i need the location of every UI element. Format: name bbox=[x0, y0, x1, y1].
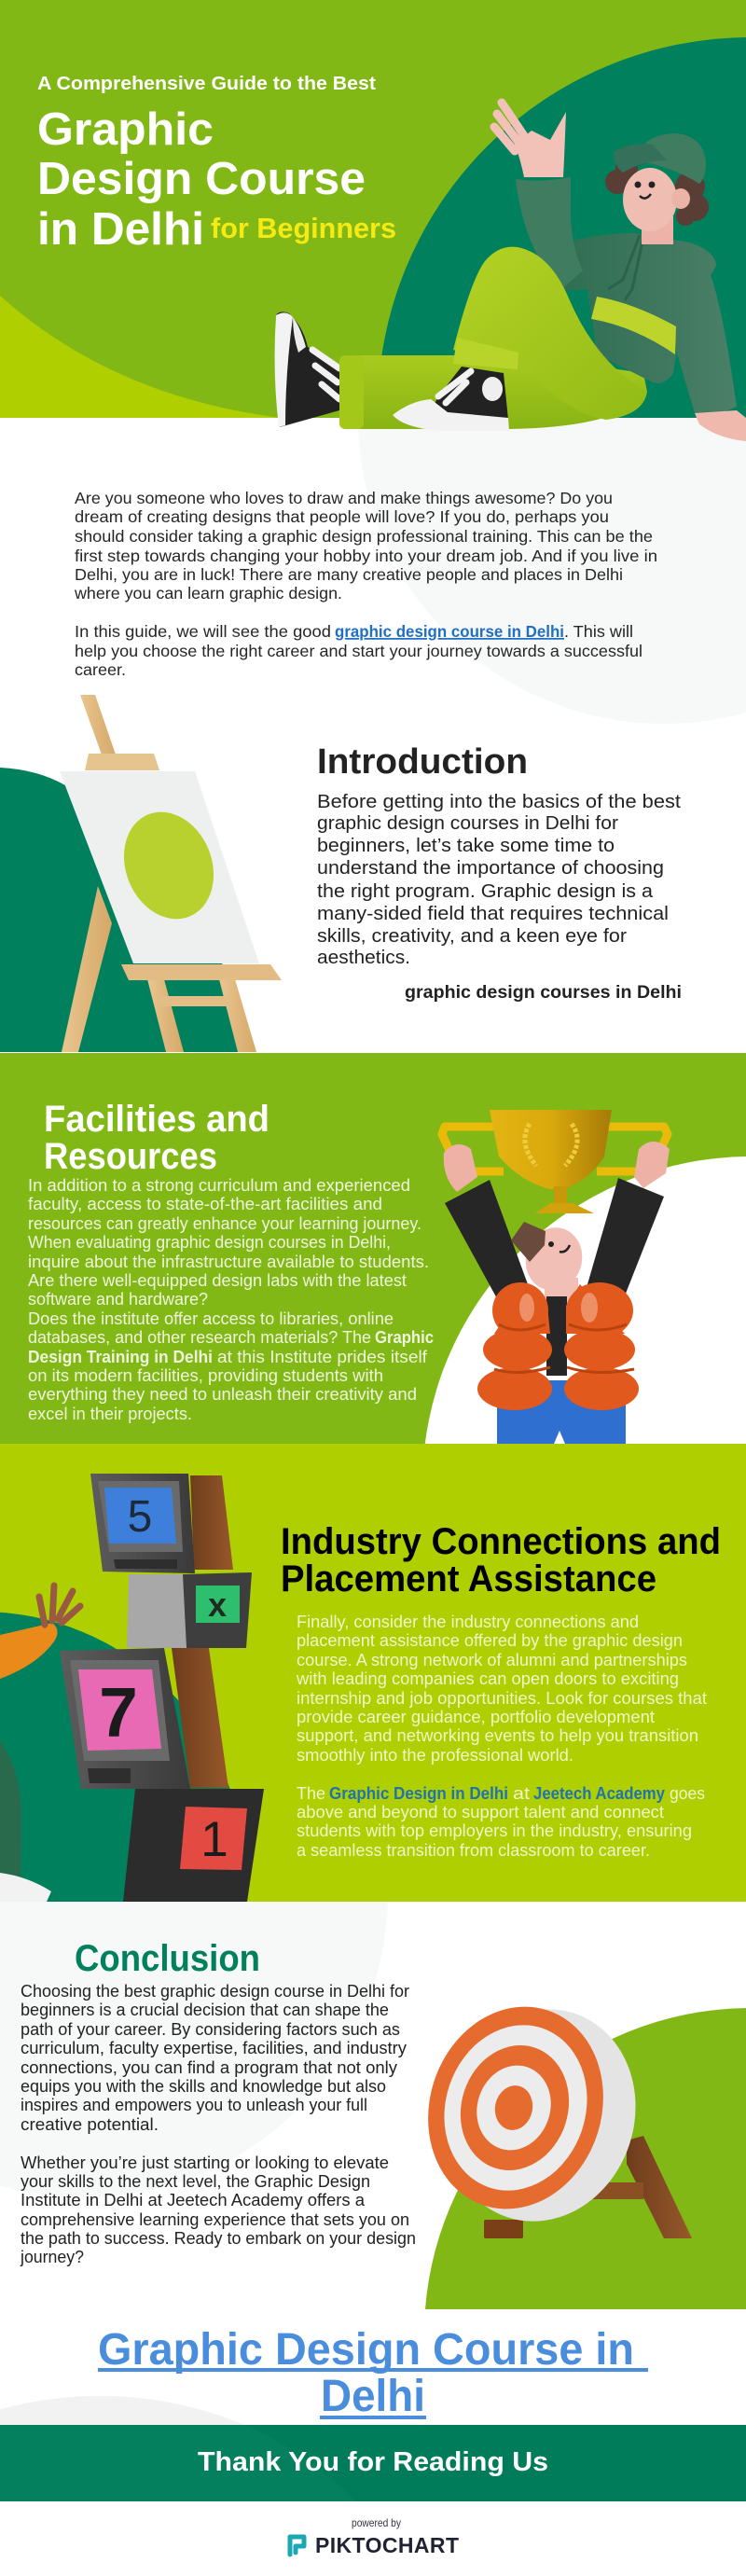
illustration: sitting character bbox=[275, 103, 746, 441]
paragraph two: comprehensive learning experience that sets you on bbox=[21, 2209, 409, 2229]
paragraph one: path of your career. By considering factors such as bbox=[21, 2019, 400, 2039]
text block: opening paragraphs: In this guide, we will see the good bbox=[75, 622, 331, 641]
panel: industry connections bbox=[0, 1444, 746, 1902]
paragraph: resources can greatly enhance your learning journey. bbox=[28, 1213, 421, 1233]
paragraph two: at bbox=[513, 1784, 530, 1803]
panel: header bbox=[0, 0, 746, 441]
heading: Industry Connections and bbox=[281, 1521, 721, 1562]
paragraph one: internship and job opportunities. Look for courses that bbox=[297, 1689, 707, 1708]
paragraph: on its modern facilities, providing students with bbox=[28, 1365, 383, 1385]
green blob bbox=[0, 768, 241, 1052]
paragraph: In addition to a strong curriculum and experienced bbox=[28, 1175, 410, 1195]
text block: opening paragraphs: . This will bbox=[564, 622, 633, 641]
illustration: person holding trophy bbox=[442, 1110, 670, 1444]
paragraph two: Institute in Delhi at Jeetech Academy offers a bbox=[21, 2190, 366, 2209]
text block: opening paragraphs: Delhi, you are in luck! There are many creative people and places in Delhi bbox=[75, 565, 623, 584]
paragraph two: journey? bbox=[20, 2247, 84, 2266]
paragraph: Design Training in Delhi bbox=[28, 1347, 213, 1366]
heading: Placement Assistance bbox=[281, 1558, 656, 1600]
paragraph one: Choosing the best graphic design course in Delhi for bbox=[21, 1981, 409, 2001]
paragraph bbox=[317, 791, 681, 968]
paragraph: many-sided field that requires technical bbox=[317, 903, 669, 924]
paragraph: Are there well-equipped design labs with the latest bbox=[28, 1270, 407, 1290]
tagline: for Beginners bbox=[211, 212, 396, 244]
paragraph: beginners, let’s take some time to bbox=[317, 835, 615, 856]
link heading: Delhi bbox=[321, 2372, 425, 2421]
paragraph: aesthetics. bbox=[317, 947, 410, 968]
paragraph one: course. A strong network of alumni and partnerships bbox=[297, 1651, 687, 1669]
powered by: powered by bbox=[352, 2516, 401, 2529]
panel: introduction bbox=[0, 695, 682, 1052]
paragraph one: equips you with the skills and knowledge but also bbox=[21, 2076, 386, 2096]
paragraph: skills, creativity, and a keen eye for bbox=[317, 925, 627, 947]
text block: opening paragraphs bbox=[74, 489, 657, 679]
illustration: retro monitors: 7 bbox=[99, 1673, 138, 1752]
paragraph one: with leading companies can open doors to exciting bbox=[296, 1669, 679, 1688]
icon: logo mark bbox=[290, 2537, 304, 2555]
paragraph one: connections, you can find a program that not only bbox=[21, 2057, 398, 2077]
text block: opening paragraphs: dream of creating designs that people will love? If you do, perhaps you bbox=[75, 507, 609, 526]
illustration: target bbox=[403, 1984, 692, 2246]
paragraph two: your skills to the next level, the Graphic Design bbox=[21, 2171, 370, 2191]
heading bbox=[44, 1099, 269, 1177]
paragraph one: support, and networking events to help you transition bbox=[297, 1726, 698, 1745]
illustration: retro monitors: x bbox=[208, 1586, 227, 1624]
paragraph: databases, and other research materials? The bbox=[28, 1327, 371, 1347]
panel: thank you band bbox=[0, 2425, 746, 2501]
illustration: retro monitors: 1 bbox=[200, 1812, 228, 1867]
subtitle: A Comprehensive Guide to the Best bbox=[37, 74, 376, 94]
paragraph: faculty, access to state-of-the-art facilities and bbox=[28, 1194, 382, 1213]
grey arc bbox=[0, 2396, 244, 2425]
paragraph two: goes bbox=[670, 1784, 705, 1803]
text block: opening paragraphs: first step towards changing your hobby into your dream job. And if you live in bbox=[75, 547, 657, 565]
heading bbox=[281, 1521, 721, 1600]
vest puffs bbox=[477, 1282, 639, 1410]
footer: Piktochart logo bbox=[290, 2516, 459, 2557]
panel: intro grey circle bbox=[358, 112, 746, 724]
paragraph two: Graphic Design in Delhi bbox=[329, 1784, 508, 1803]
panel: facilities and resources bbox=[0, 1053, 746, 1444]
illustration: easel bbox=[60, 695, 282, 1052]
paragraph: the right program. Graphic design is a bbox=[317, 880, 654, 902]
paragraph one: creative potential. bbox=[21, 2114, 159, 2134]
paragraph: inquire about the infrastructure available to students. bbox=[28, 1252, 429, 1271]
paragraph one: curriculum, faculty expertise, facilities, and industry bbox=[21, 2038, 408, 2057]
paragraph: understand the importance of choosing bbox=[317, 857, 664, 879]
paragraph one: smoothly into the professional world. bbox=[297, 1746, 573, 1765]
paragraph one: provide career guidance, portfolio development bbox=[297, 1708, 655, 1726]
text block: opening paragraphs: should consider taking a graphic design professional training. This can be the bbox=[75, 527, 653, 546]
title: Design Course bbox=[37, 154, 366, 204]
link heading bbox=[98, 2325, 648, 2421]
paragraph: at this Institute prides itself bbox=[217, 1347, 428, 1366]
heading: Facilities and bbox=[44, 1099, 269, 1140]
caption: graphic design courses in Delhi bbox=[405, 982, 682, 1003]
paragraph: When evaluating graphic design courses in Delhi, bbox=[28, 1232, 391, 1252]
heading: Conclusion bbox=[75, 1938, 260, 1979]
paragraph two: above and beyond to support talent and connect bbox=[297, 1803, 664, 1821]
paragraph: Does the institute offer access to libraries, online bbox=[28, 1309, 394, 1328]
title bbox=[37, 104, 366, 255]
paragraph two bbox=[297, 1784, 705, 1860]
panel: conclusion bbox=[21, 1944, 746, 2309]
heading: Introduction bbox=[317, 742, 528, 782]
text block: opening paragraphs: where you can learn graphic design. bbox=[74, 584, 342, 602]
paragraph one bbox=[21, 1981, 409, 2134]
paragraph one bbox=[296, 1613, 707, 1765]
paragraph: excel in their projects. bbox=[28, 1404, 192, 1423]
paragraph two: the path to success. Ready to embark on your design bbox=[21, 2228, 416, 2248]
paragraph two: The bbox=[297, 1784, 325, 1803]
heading: Resources bbox=[44, 1136, 217, 1177]
text block: opening paragraphs: Are you someone who loves to draw and make things awesome? Do you bbox=[75, 489, 613, 507]
paragraph: everything they need to unleash their creativity and bbox=[28, 1384, 417, 1404]
illustration: retro monitors: 5 bbox=[128, 1492, 152, 1542]
paragraph one: Finally, consider the industry connections and bbox=[297, 1613, 639, 1631]
text block: opening paragraphs: help you choose the right career and start your journey towards a successful bbox=[75, 642, 642, 660]
illustration: furry arm bbox=[0, 1586, 80, 1902]
wordmark: PIKTOCHART bbox=[315, 2533, 459, 2557]
title: in Delhi bbox=[37, 204, 204, 255]
illustration: retro monitors bbox=[60, 1474, 264, 1902]
paragraph: Graphic bbox=[375, 1327, 434, 1347]
paragraph two: Whether you’re just starting or looking to elevate bbox=[21, 2153, 389, 2172]
paragraph two bbox=[20, 2153, 416, 2266]
thank you text: Thank You for Reading Us bbox=[198, 2447, 548, 2477]
text block: opening paragraphs: career. bbox=[75, 660, 126, 679]
link heading: Graphic Design Course in bbox=[98, 2325, 634, 2375]
paragraph bbox=[28, 1175, 434, 1423]
paragraph one: beginners is a crucial decision that can shape the bbox=[21, 2000, 389, 2019]
title: Graphic bbox=[37, 104, 214, 155]
paragraph: software and hardware? bbox=[28, 1289, 208, 1309]
paragraph one: inspires and empowers you to unleash your full bbox=[21, 2095, 367, 2114]
paragraph two: a seamless transition from classroom to career. bbox=[297, 1841, 650, 1860]
text block: opening paragraphs: graphic design course in Delhi bbox=[335, 622, 564, 641]
paragraph: graphic design courses in Delhi for bbox=[317, 812, 618, 834]
paragraph one: placement assistance offered by the graphic design bbox=[297, 1631, 683, 1650]
paragraph two: Jeetech Academy bbox=[533, 1784, 665, 1803]
paragraph two: students with top employers in the industry, ensuring bbox=[297, 1821, 692, 1840]
paragraph: Before getting into the basics of the best bbox=[317, 791, 681, 812]
